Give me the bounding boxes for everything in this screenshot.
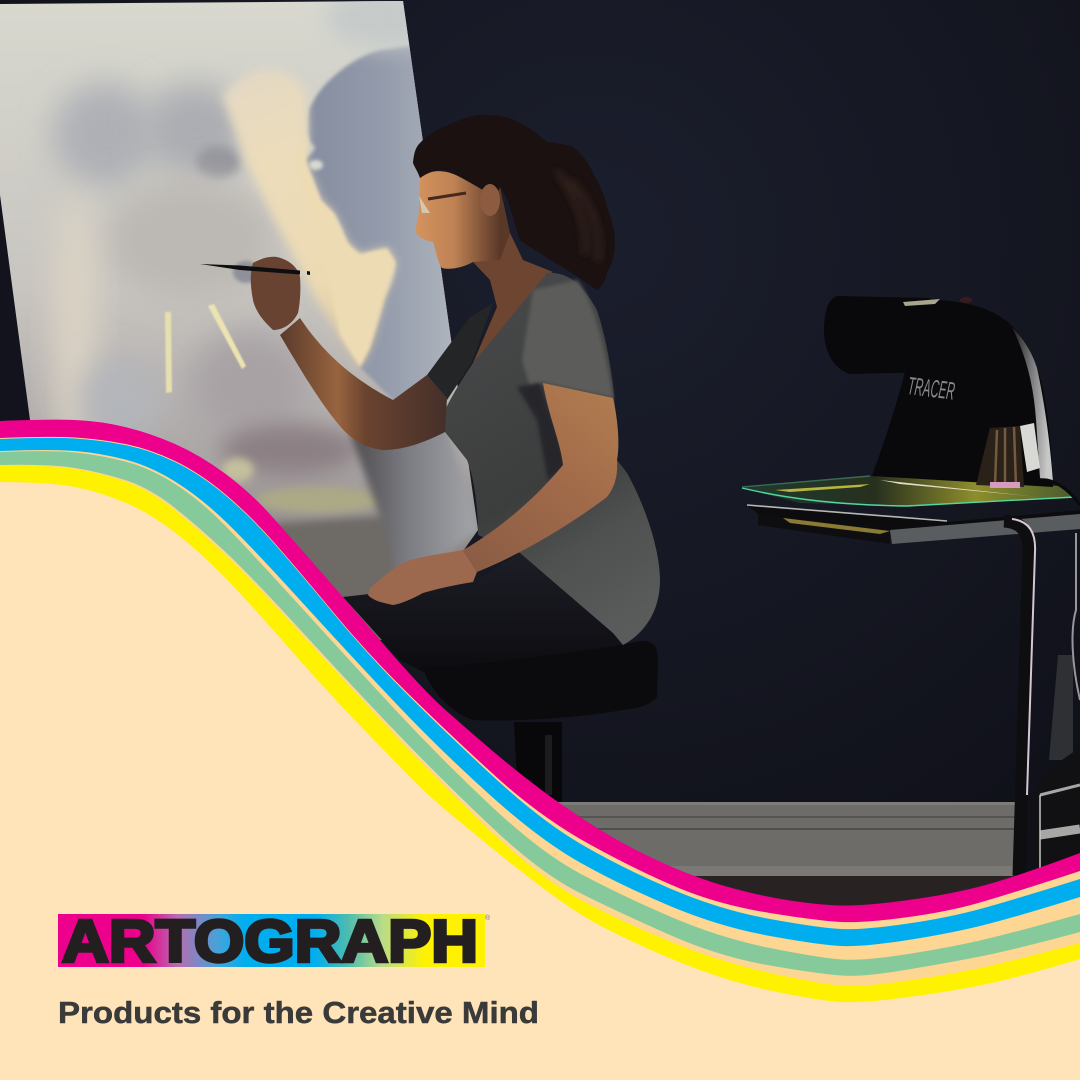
gold reflection [783,518,890,534]
lens tube [824,296,935,374]
glasses [419,193,466,213]
projector table and cart [742,476,1080,876]
ear [480,184,500,216]
projector [824,296,1080,505]
baseboard and floor [540,802,1080,916]
stool seat [423,641,658,721]
cable [1073,533,1080,700]
logo: Artograph wordmark: ARTOGRAPH [62,908,478,974]
top vent [903,299,940,306]
drawing canvas with projected image [0,0,480,640]
projected light marks [165,312,172,393]
face [416,171,510,269]
colour wave: yellow band [0,466,1080,1080]
colour wave: magenta band [0,420,1080,1080]
warning label [1020,423,1040,472]
glass tray [742,476,1075,506]
projector: TRACER [906,372,956,406]
resting arm [463,383,618,572]
vent slats [976,426,1024,488]
shadow under sleeve [517,383,566,480]
colour wave: green band [0,451,1080,1080]
table shelf [890,514,1080,544]
jeans [343,553,625,672]
stool column [514,722,562,802]
shirt [445,273,660,645]
artist at work [200,115,660,802]
warm projected light band [222,70,395,367]
colour wave: blue band [0,438,1080,1080]
crisp edge of light against silhouette [295,133,395,367]
cream panel [0,482,1080,1080]
knob [960,297,972,303]
resting hand [368,550,477,605]
logo: Artograph wordmark: ® [485,914,491,922]
body edge highlight [1012,327,1053,482]
neck and chest [473,210,553,363]
hair and ponytail [413,115,615,290]
table leg [1004,521,1029,876]
paint brush [200,264,300,274]
cart frame [1030,748,1080,876]
reaching arm [280,318,447,450]
tagline: Products for the Creative Mind [58,995,539,1030]
pale top-right corner of canvas [328,1,410,58]
artist's shadow on canvas [305,45,455,410]
lower canvas shadow [347,432,478,568]
left shoulder sleeve [427,303,493,400]
cart side panel [1049,655,1073,760]
sleeve highlight [522,280,613,398]
ponytail highlights [556,170,599,262]
power cable [1040,480,1080,505]
dark table frame [747,505,1080,530]
projector body [872,300,1053,487]
hand holding brush [251,257,300,330]
